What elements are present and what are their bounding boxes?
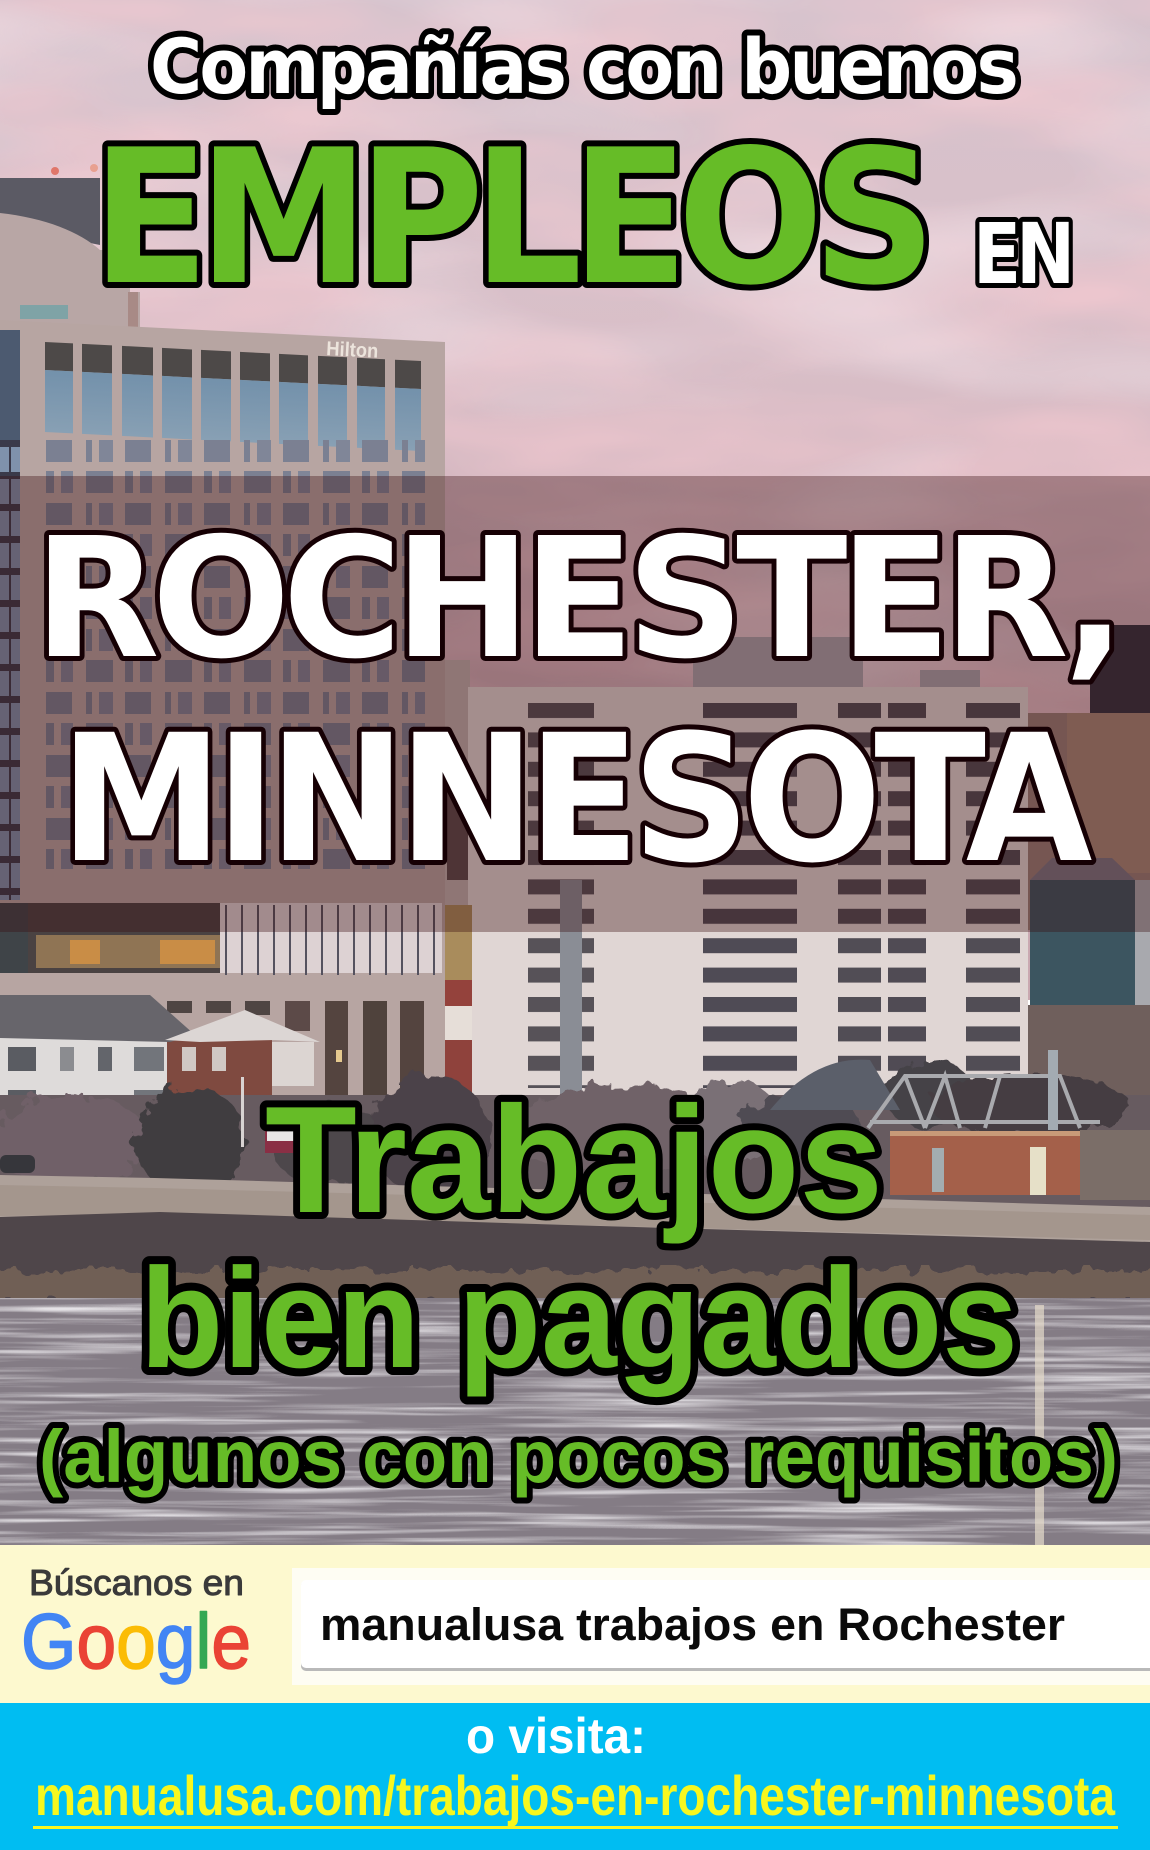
- heading: EMPLEOS: EMPLEOS: [92, 109, 925, 326]
- subheading: algunos con pocos requisitos: (algunos con pocos requisitos): [39, 1415, 1118, 1498]
- riverside walkway: [0, 1175, 1150, 1300]
- dome roof: [770, 1060, 900, 1110]
- parked car and sign: [0, 1077, 299, 1173]
- mid-rise building at right: [445, 637, 1056, 1190]
- logo: Google: Google: [21, 1597, 251, 1685]
- dark translucent band: [0, 476, 1150, 932]
- heading: Compañías con buenos: Compañías con buenos: [150, 22, 1016, 111]
- heading: EN: EN: [973, 205, 1070, 303]
- heading: ROCHESTER,: ROCHESTER,: [34, 503, 1118, 696]
- podium windows: [167, 1001, 424, 1111]
- sky: [0, 0, 1150, 1000]
- panel: website link: [0, 1703, 1150, 1850]
- search query: manualusa trabajos en Rochester: [320, 1599, 1065, 1650]
- river water: [0, 1298, 1150, 1546]
- heading: Trabajos: Trabajos: [265, 1075, 883, 1245]
- url underline: [33, 1826, 1118, 1829]
- domed tower: [0, 164, 140, 330]
- buildings at far right: [1028, 625, 1150, 1180]
- shrub backdrop: [0, 1095, 1150, 1220]
- Hilton hotel building: [0, 320, 445, 1175]
- Hilton sign: Hilton: [326, 338, 379, 363]
- panel: Google search: [0, 1545, 1150, 1703]
- search area background: [292, 1568, 1150, 1685]
- Hilton top windows: [45, 342, 421, 451]
- trees: [0, 1060, 1130, 1195]
- apartment house: [0, 995, 320, 1130]
- Hilton window grid: [45, 439, 425, 869]
- river bank: [0, 1270, 1150, 1302]
- search box: [301, 1580, 1150, 1671]
- label: Búscanos en: Búscanos en: [29, 1562, 244, 1603]
- heading: MINNESOTA: MINNESOTA: [60, 697, 1092, 902]
- electrical substation and small brick building: [868, 1050, 1150, 1200]
- label: o visita: o visita:: [466, 1708, 646, 1764]
- glass band: [0, 903, 442, 975]
- heading: bien pagados: bien pagados: [140, 1239, 1018, 1398]
